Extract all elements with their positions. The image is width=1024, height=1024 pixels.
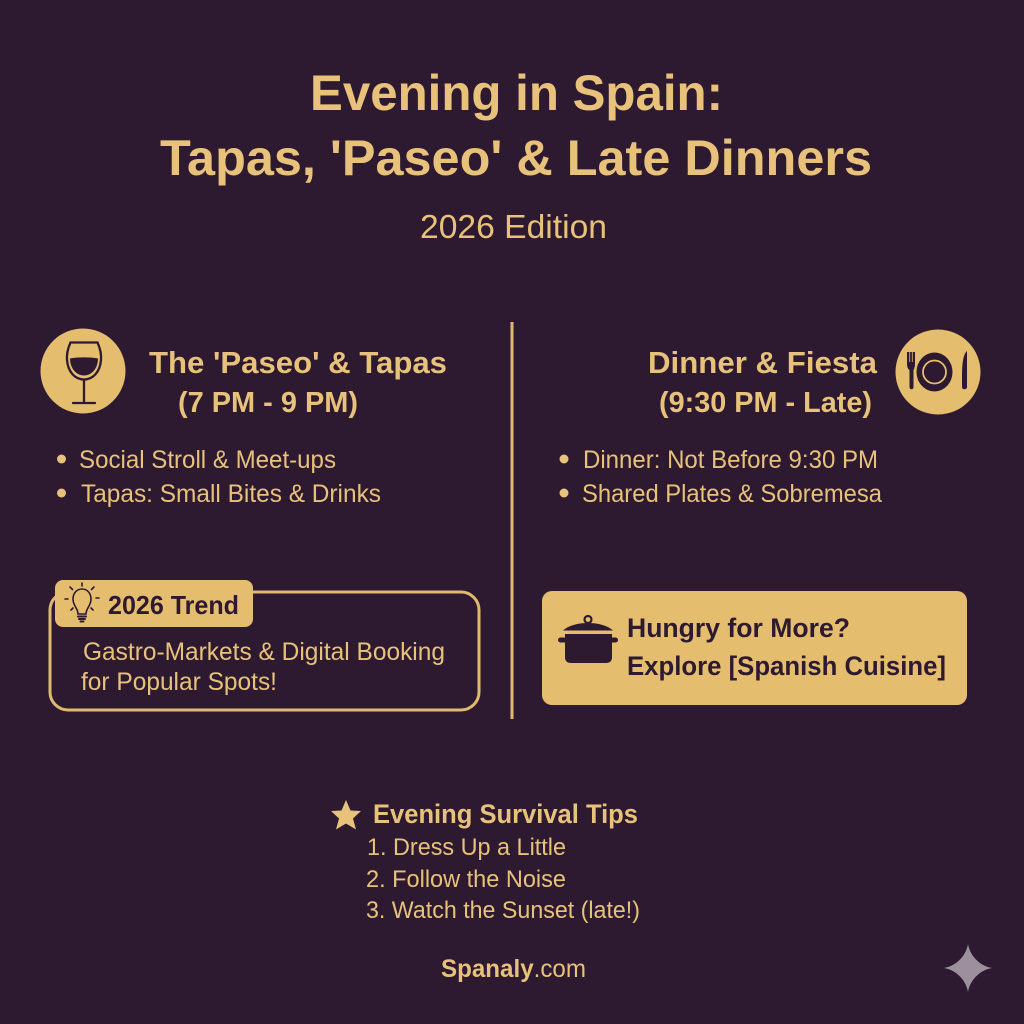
heading [149,345,447,419]
tips list: 1. Dress Up a Little [367,834,566,861]
trend text: Gastro-Markets & Digital Booking [83,638,445,666]
bullet list: Shared Plates & Sobremesa [582,480,882,508]
bullet list [560,446,882,508]
heading: (7 PM - 9 PM) [178,387,358,419]
call to action text: Explore [Spanish Cuisine] [627,651,946,681]
heading [648,345,878,419]
icon: light bulb [65,583,99,622]
icon: wine glass [40,328,126,414]
panel: evening survival tips [331,799,640,924]
icon: cooking pot [558,616,618,663]
bullet list: Tapas: Small Bites & Drinks [81,480,381,508]
tips heading: Evening Survival Tips [373,799,638,829]
call to action [542,591,967,705]
heading: The 'Paseo' & Tapas [149,345,447,380]
tips list: 2. Follow the Noise [366,866,566,893]
subtitle: 2026 Edition [420,208,607,245]
trend tag [55,580,253,627]
trend tag: 2026 Trend [108,590,239,620]
call to action text [627,613,946,681]
icon: plate and cutlery [896,330,980,414]
title: Tapas, 'Paseo' & Late Dinners [160,130,872,186]
callout: 2026 trend [50,580,479,710]
title [160,65,872,186]
bullet list: Dinner: Not Before 9:30 PM [583,446,878,474]
footer brand: Spanaly.com [441,955,586,983]
tips list [366,834,640,924]
call to action text: Hungry for More? [627,613,850,643]
panel: paseo and tapas [40,328,447,508]
heading: Dinner & Fiesta [648,345,878,380]
trend text [81,638,445,696]
title: Evening in Spain: [310,65,723,121]
heading: (9:30 PM - Late) [659,387,872,419]
bullet list [57,446,381,508]
icon: star [331,800,361,830]
panel: dinner and fiesta [560,330,980,508]
bullet list: Social Stroll & Meet-ups [79,446,336,474]
center divider [510,322,514,719]
tips list: 3. Watch the Sunset (late!) [366,897,640,924]
trend text: for Popular Spots! [81,668,277,696]
icon: sparkle [944,944,992,992]
